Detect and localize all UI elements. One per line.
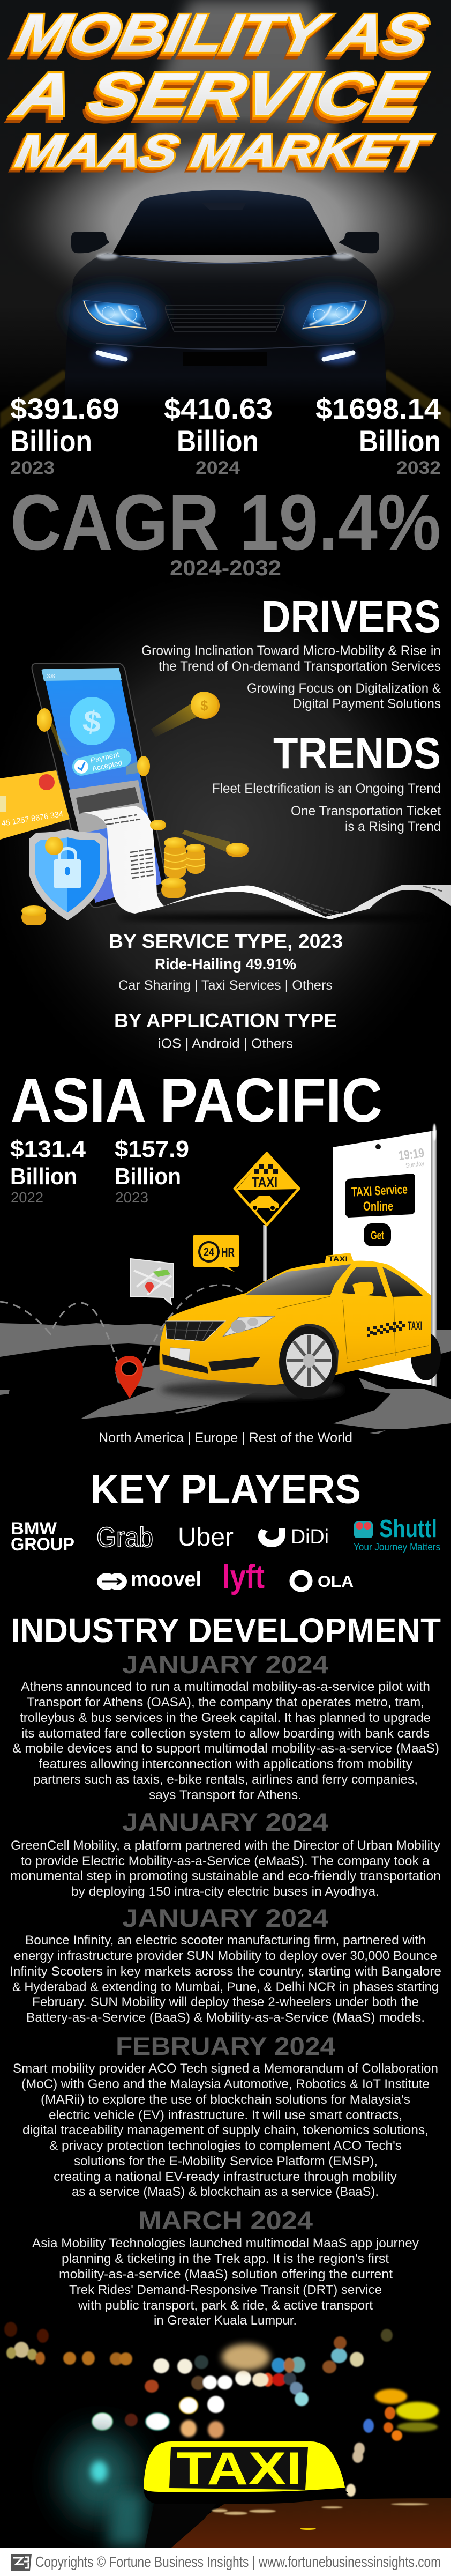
coins: $ <box>200 697 208 714</box>
by service type <box>109 930 343 993</box>
yellow taxi: TAXI <box>408 1319 422 1333</box>
headlight <box>223 1316 275 1337</box>
development: Athens <box>12 1650 439 1802</box>
description: Athens announced to run a multimodal mobility-as-a-service pilot with <box>21 1680 430 1694</box>
driver two <box>247 681 441 711</box>
phone with app: TAXI Service <box>351 1182 408 1200</box>
logo: Ola <box>292 1572 354 1591</box>
CAGR: 2024-2032 <box>170 556 281 580</box>
title line: mobility as: MOBILITY AS <box>7 10 429 69</box>
body <box>160 1261 431 1385</box>
right mirror <box>339 232 379 253</box>
regional stats <box>10 1136 189 1206</box>
description: digital traceability management of supply chain, tokenomics solutions, <box>22 2123 429 2137</box>
taxi road sign <box>235 1153 299 1281</box>
bokeh lights <box>4 2322 402 2497</box>
description: with public transport, park & ride, & active transport <box>78 2298 373 2313</box>
stat: 2032: Billion <box>359 424 441 458</box>
description: features allowing interconnection with applications from mobility <box>39 1757 412 1771</box>
taxi road sign: TAXI <box>252 1174 277 1190</box>
road lines <box>0 370 451 429</box>
stat: 2024: 2024 <box>196 458 240 478</box>
description: & mobile devices and to support multimodal mobility-as-a-service (MaaS) <box>12 1741 439 1756</box>
taxi sign <box>144 2441 348 2504</box>
rear wheel <box>411 1332 441 1380</box>
logo: BMW Group: BMW <box>11 1519 57 1538</box>
description: in Greater Kuala Lumpur. <box>154 2313 297 2328</box>
description: Bounce Infinity, an electric scooter manufacturing firm, partnered with <box>25 1933 426 1948</box>
description: GreenCell Mobility, a platform partnered with the Director of Urban Mobility <box>11 1838 440 1853</box>
left headlight <box>67 287 163 340</box>
receipt ribbon shadow <box>118 914 439 922</box>
stat: 2023: 2023 <box>10 458 55 478</box>
yellow taxi: TAXI <box>328 1254 348 1263</box>
coin stacks <box>21 837 205 925</box>
description: & Hyderabad & extending to Mumbai, Pune, & Delhi NCR in phases starting <box>12 1980 439 1994</box>
description: monumental step in promoting sustainable and eco-friendly transportation <box>10 1869 441 1883</box>
spotlight glow behind car <box>0 0 451 330</box>
phone: 09:09 <box>47 674 55 679</box>
other segments: Car Sharing | Taxi Services | Others <box>118 978 333 993</box>
car body <box>64 253 387 407</box>
trend two: is a Rising Trend <box>345 819 441 834</box>
stat: 2023 <box>115 1136 189 1206</box>
trend two: One Transportation Ticket <box>291 804 441 819</box>
leading segment: Ride-Hailing 49.91% <box>155 956 296 973</box>
left fog light <box>93 348 130 363</box>
car front view <box>64 190 387 407</box>
title line: maas market: MAAS MARKET <box>9 130 432 180</box>
description: Battery-as-a-Service (BaaS) & Mobility-as-a-Service (MaaS) models. <box>26 2010 425 2025</box>
description: creating a national EV-ready infrastructure through mobility <box>54 2170 397 2184</box>
description: solutions for the E-Mobility Service Platform (EMSP), <box>74 2154 378 2169</box>
side checker and lettering <box>367 1321 405 1337</box>
grille <box>166 305 284 331</box>
taxi sign mount <box>145 2493 225 2548</box>
dashed route <box>0 1285 245 1379</box>
stat: 2032: 2032 <box>396 458 441 478</box>
title line: a service: A SERVICE <box>9 61 431 128</box>
description <box>10 1838 441 1899</box>
description: partners such as taxis, e-bike rentals, airlines and ferry companies, <box>33 1772 418 1787</box>
logo: DiDi <box>258 1526 329 1548</box>
stat: 2024: $410.63 <box>164 393 273 425</box>
by service type: BY SERVICE TYPE, 2023 <box>109 930 343 952</box>
taxi app illustration <box>0 1124 451 1434</box>
stat: 2024: Billion <box>177 424 259 458</box>
logo: Shuttl: Your Journey Matters <box>354 1542 440 1553</box>
logo: DiDi: DiDi <box>291 1526 329 1548</box>
payment accepted pill: Accepted <box>91 758 123 773</box>
drivers <box>141 591 441 711</box>
world map <box>0 1323 451 1434</box>
phone <box>32 663 168 908</box>
stat: 2022: $131.4 <box>10 1136 86 1162</box>
phone with app: Sunday <box>405 1160 425 1169</box>
logo: Shuttl: Shuttl <box>379 1515 437 1542</box>
phone with app: 19:19 <box>397 1146 425 1163</box>
key player logos <box>11 1515 440 1595</box>
trends <box>212 728 441 834</box>
stat: 2023: 2023 <box>115 1189 148 1206</box>
coins <box>37 692 249 857</box>
location pin <box>115 1356 143 1399</box>
description: planning & ticketing in the Trek app. It is the region's first <box>62 2252 389 2266</box>
description: by deploying 150 intra-city electric buses in Ayodhya. <box>71 1884 379 1899</box>
description <box>10 1933 441 2025</box>
description: mobility-as-a-service (MaaS) solution offering the current <box>59 2267 393 2282</box>
logo: Lyft: lyft <box>222 1558 265 1595</box>
roof sign <box>325 1253 354 1264</box>
trends heading: TRENDS <box>273 728 441 778</box>
left mirror <box>71 232 109 253</box>
description: its automated fare collection system to allow boarding with bank cards <box>21 1726 430 1741</box>
payment accepted pill: Payment <box>89 750 120 764</box>
description: (MARii) to explore the use of blockchain solutions for Malaysia's <box>41 2092 410 2107</box>
date: JANUARY 2024 <box>122 1808 328 1836</box>
title line: a service: A SERVICE <box>9 61 431 128</box>
description <box>32 2236 419 2328</box>
car roof <box>161 2498 451 2548</box>
title line: maas market: MAAS MARKET <box>12 125 435 176</box>
stat: 2022: Billion <box>10 1163 77 1190</box>
description: to provide Electric Mobility-as-a-Service (eMaaS). The company took a <box>21 1854 430 1868</box>
windshield <box>246 1264 351 1295</box>
logo: Ola: OLA <box>318 1573 354 1591</box>
phone with app: Online <box>363 1199 393 1214</box>
title line: a service: A SERVICE <box>5 67 427 134</box>
taxi sign: TAXI <box>176 2443 302 2495</box>
night street photo with taxi sign <box>4 2322 451 2548</box>
24 hour bubble: HR <box>221 1245 235 1260</box>
coin trails <box>47 697 230 852</box>
phone with app: Get <box>371 1229 384 1242</box>
development: ACO Tech <box>13 2032 438 2199</box>
driver two: Digital Payment Solutions <box>292 696 441 711</box>
description: & privacy protection technologies to complement ACO Tech's <box>49 2139 402 2153</box>
description: energy infrastructure provider SUN Mobility to deploy over 30,000 Bounce <box>14 1949 437 1963</box>
development: Bounce Infinity <box>10 1904 441 2025</box>
driver one: Growing Inclination Toward Micro-Mobility & Rise in <box>141 643 441 658</box>
stat: 2022 <box>10 1136 86 1206</box>
stat: 2023: Billion <box>10 424 92 458</box>
title line: mobility as: MOBILITY AS <box>10 7 431 66</box>
trend two <box>291 804 441 834</box>
description: Transport for Athens (OASA), the company that operates metro, tram, <box>27 1695 424 1710</box>
description <box>12 1680 439 1802</box>
description: electric vehicle (EV) infrastructure. It will use smart contracts, <box>49 2108 402 2122</box>
credit card: 45 1257 8676 334 <box>1 810 64 828</box>
logo: Grab: Grab <box>96 1522 153 1553</box>
shield with lock <box>29 829 107 920</box>
credit card <box>0 770 70 840</box>
logo: moovel <box>97 1568 201 1591</box>
number plate <box>169 1348 190 1361</box>
mirror <box>352 1282 374 1296</box>
door lines <box>276 1296 429 1363</box>
footer <box>0 2548 451 2576</box>
right headlight <box>287 287 383 340</box>
description: Smart mobility provider ACO Tech signed a Memorandum of Collaboration <box>13 2061 438 2076</box>
title line: a service: A SERVICE <box>7 64 429 131</box>
description <box>13 2061 438 2199</box>
map bubble <box>131 1259 174 1304</box>
market size stats <box>10 393 441 478</box>
front wheel <box>279 1324 339 1399</box>
region heading: ASIA PACIFIC <box>11 1065 382 1135</box>
title <box>5 4 435 180</box>
grille <box>166 1321 226 1341</box>
stat: 2032 <box>315 393 441 478</box>
stat: 2032: $1698.14 <box>315 393 441 425</box>
stat: 2022: 2022 <box>11 1189 43 1206</box>
title line: maas market: MAAS MARKET <box>12 125 435 176</box>
24 hour bubble: 24 <box>204 1245 215 1259</box>
title line: maas market: MAAS MARKET <box>10 128 434 178</box>
date: MARCH 2024 <box>138 2206 313 2234</box>
driver two: Growing Focus on Digitalization & <box>247 681 441 696</box>
receipt <box>82 806 451 919</box>
date: FEBRUARY 2024 <box>116 2032 335 2060</box>
title line: mobility as: MOBILITY AS <box>11 4 432 63</box>
number plate <box>183 352 267 366</box>
phone with app <box>333 1124 437 1387</box>
receipt printer <box>69 780 146 834</box>
stat: 2023: $391.69 <box>10 393 119 425</box>
driver one: the Trend of On-demand Transportation Services <box>159 659 441 674</box>
logo: BMW Group <box>11 1519 74 1555</box>
car shadow <box>161 1381 343 1398</box>
lower grilles <box>162 1354 208 1374</box>
logo: Uber: Uber <box>178 1523 234 1551</box>
date: JANUARY 2024 <box>122 1904 328 1932</box>
payment accepted pill <box>71 747 133 777</box>
stat: 2023: $157.9 <box>115 1136 189 1162</box>
by application type: BY APPLICATION TYPE <box>114 1009 337 1031</box>
logo <box>11 2554 32 2571</box>
development: Asia Mobility <box>32 2206 419 2328</box>
description: Asia Mobility Technologies launched multimodal MaaS app journey <box>32 2236 419 2251</box>
description: February. SUN Mobility will deploy these 2-wheelers under both the <box>32 1995 419 2009</box>
payment illustration <box>0 663 451 925</box>
blurred lights <box>62 2344 439 2547</box>
phone: $ <box>81 703 103 739</box>
description: says Transport for Athens. <box>149 1788 302 1802</box>
stat: 2024 <box>164 393 273 478</box>
description: Infinity Scooters in key markets across the country, starting with Bangalore <box>10 1964 441 1979</box>
description: (MoC) with Geno and the Malaysia Automotive, Robotics & IoT Institute <box>21 2077 430 2091</box>
date: JANUARY 2024 <box>122 1650 328 1679</box>
other regions: North America | Europe | Rest of the World <box>99 1430 352 1445</box>
side windows <box>342 1267 387 1297</box>
logo: moovel: moovel <box>131 1568 201 1591</box>
description: Trek Rides' Demand-Responsive Transit (DRT) service <box>69 2283 382 2297</box>
stat: 2023: Billion <box>115 1163 181 1190</box>
industry development heading: INDUSTRY DEVELOPMENT <box>11 1611 441 1650</box>
stat: 2023 <box>10 393 119 478</box>
development: GreenCell <box>10 1808 441 1899</box>
key players heading: KEY PLAYERS <box>91 1467 361 1512</box>
trend one: Fleet Electrification is an Ongoing Trend <box>212 781 441 796</box>
by application type <box>114 1009 337 1051</box>
application segments: iOS | Android | Others <box>158 1036 293 1051</box>
logo: Shuttl <box>354 1515 440 1553</box>
description: as a service (MaaS) & blockchain as a service (BaaS). <box>72 2185 379 2199</box>
description: trolleybus & bus services in the Greek capital. It has planned to upgrade <box>20 1711 431 1725</box>
driver one <box>141 643 441 674</box>
car roof and windshield <box>112 190 338 255</box>
title line: mobility as: MOBILITY AS <box>11 4 432 63</box>
24 hour bubble <box>193 1235 239 1272</box>
yellow taxi <box>160 1253 441 1399</box>
right fog light <box>319 348 356 363</box>
logo: BMW Group: GROUP <box>11 1534 74 1555</box>
